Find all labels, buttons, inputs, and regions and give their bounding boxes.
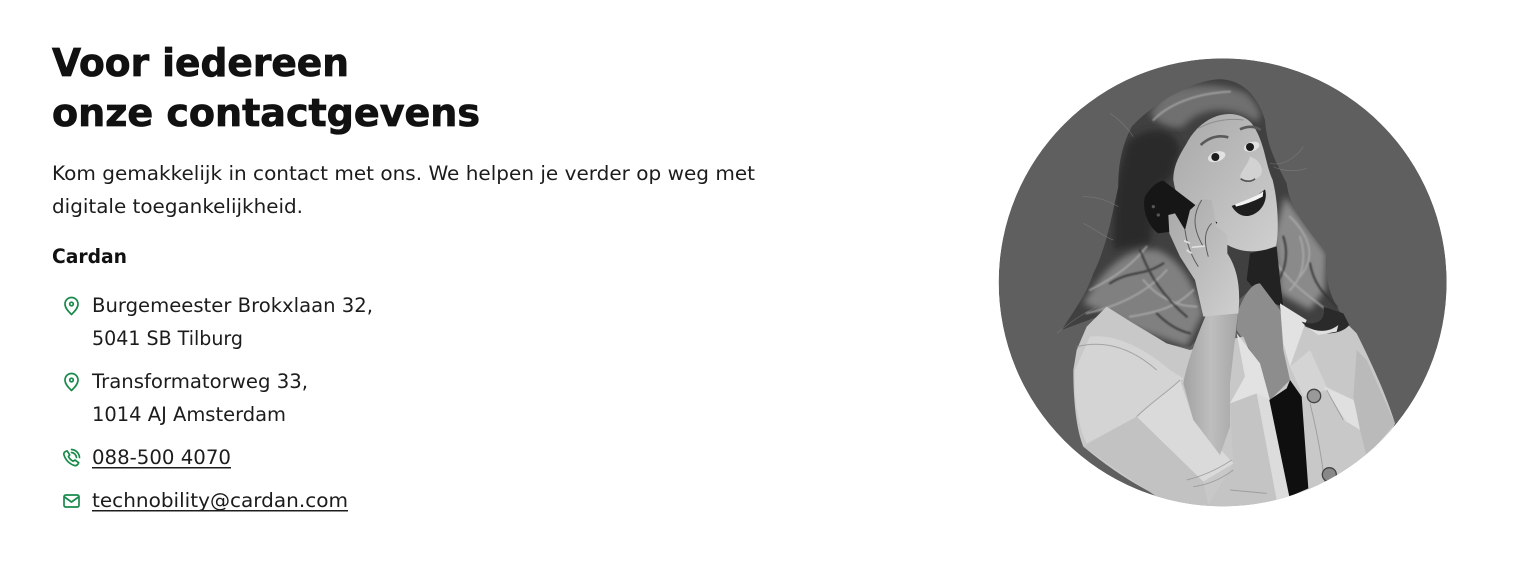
hair strands [1087,92,1337,333]
hand [1168,199,1239,317]
address: Amsterdam: Transformatorweg 33, [91,370,308,393]
chest [1237,283,1290,400]
jacket folds [1077,344,1343,500]
underline [92,510,348,512]
rings [1184,241,1205,253]
jacket [1073,303,1395,513]
heading: onze contactgevens [52,91,480,135]
heading: Voor iedereen [52,41,349,85]
nose [1240,157,1262,180]
face [1173,114,1278,251]
email: technobility@cardan.com [92,489,348,512]
black top [1269,380,1308,497]
mouth [1232,189,1266,216]
phone: 088-500 4070 [92,446,231,469]
jacket shading [1075,336,1395,513]
arm [1183,310,1238,455]
contact list [64,294,373,512]
phone [1144,181,1217,235]
buttons [1307,389,1336,482]
dark hair lock [1302,307,1349,333]
heading [52,41,480,135]
icon: map pin [65,298,78,314]
collars [1230,303,1307,403]
intro text: Kom gemakkelijk in contact met ons. We helpen je verder op weg met [52,162,755,185]
icon: phone [64,450,80,466]
icon: envelope [64,495,79,507]
intro text [52,162,755,218]
eyes [1198,119,1261,164]
company name: Cardan [52,245,127,268]
underline [92,467,231,468]
address: Tilburg [65,294,373,350]
icon: map pin [65,374,78,390]
flyaway hairs [1057,113,1307,333]
intro text: digitale toegankelijkheid. [52,195,303,218]
hair base and tones [1062,79,1340,346]
address: Tilburg: 5041 SB Tilburg [92,327,243,350]
photo: woman on the phone [999,58,1447,513]
address: Amsterdam [65,370,308,426]
address: Tilburg: Burgemeester Brokxlaan 32, [92,294,373,317]
under-chin shadow [1247,247,1283,307]
address: Amsterdam: 1014 AJ Amsterdam [92,403,286,426]
